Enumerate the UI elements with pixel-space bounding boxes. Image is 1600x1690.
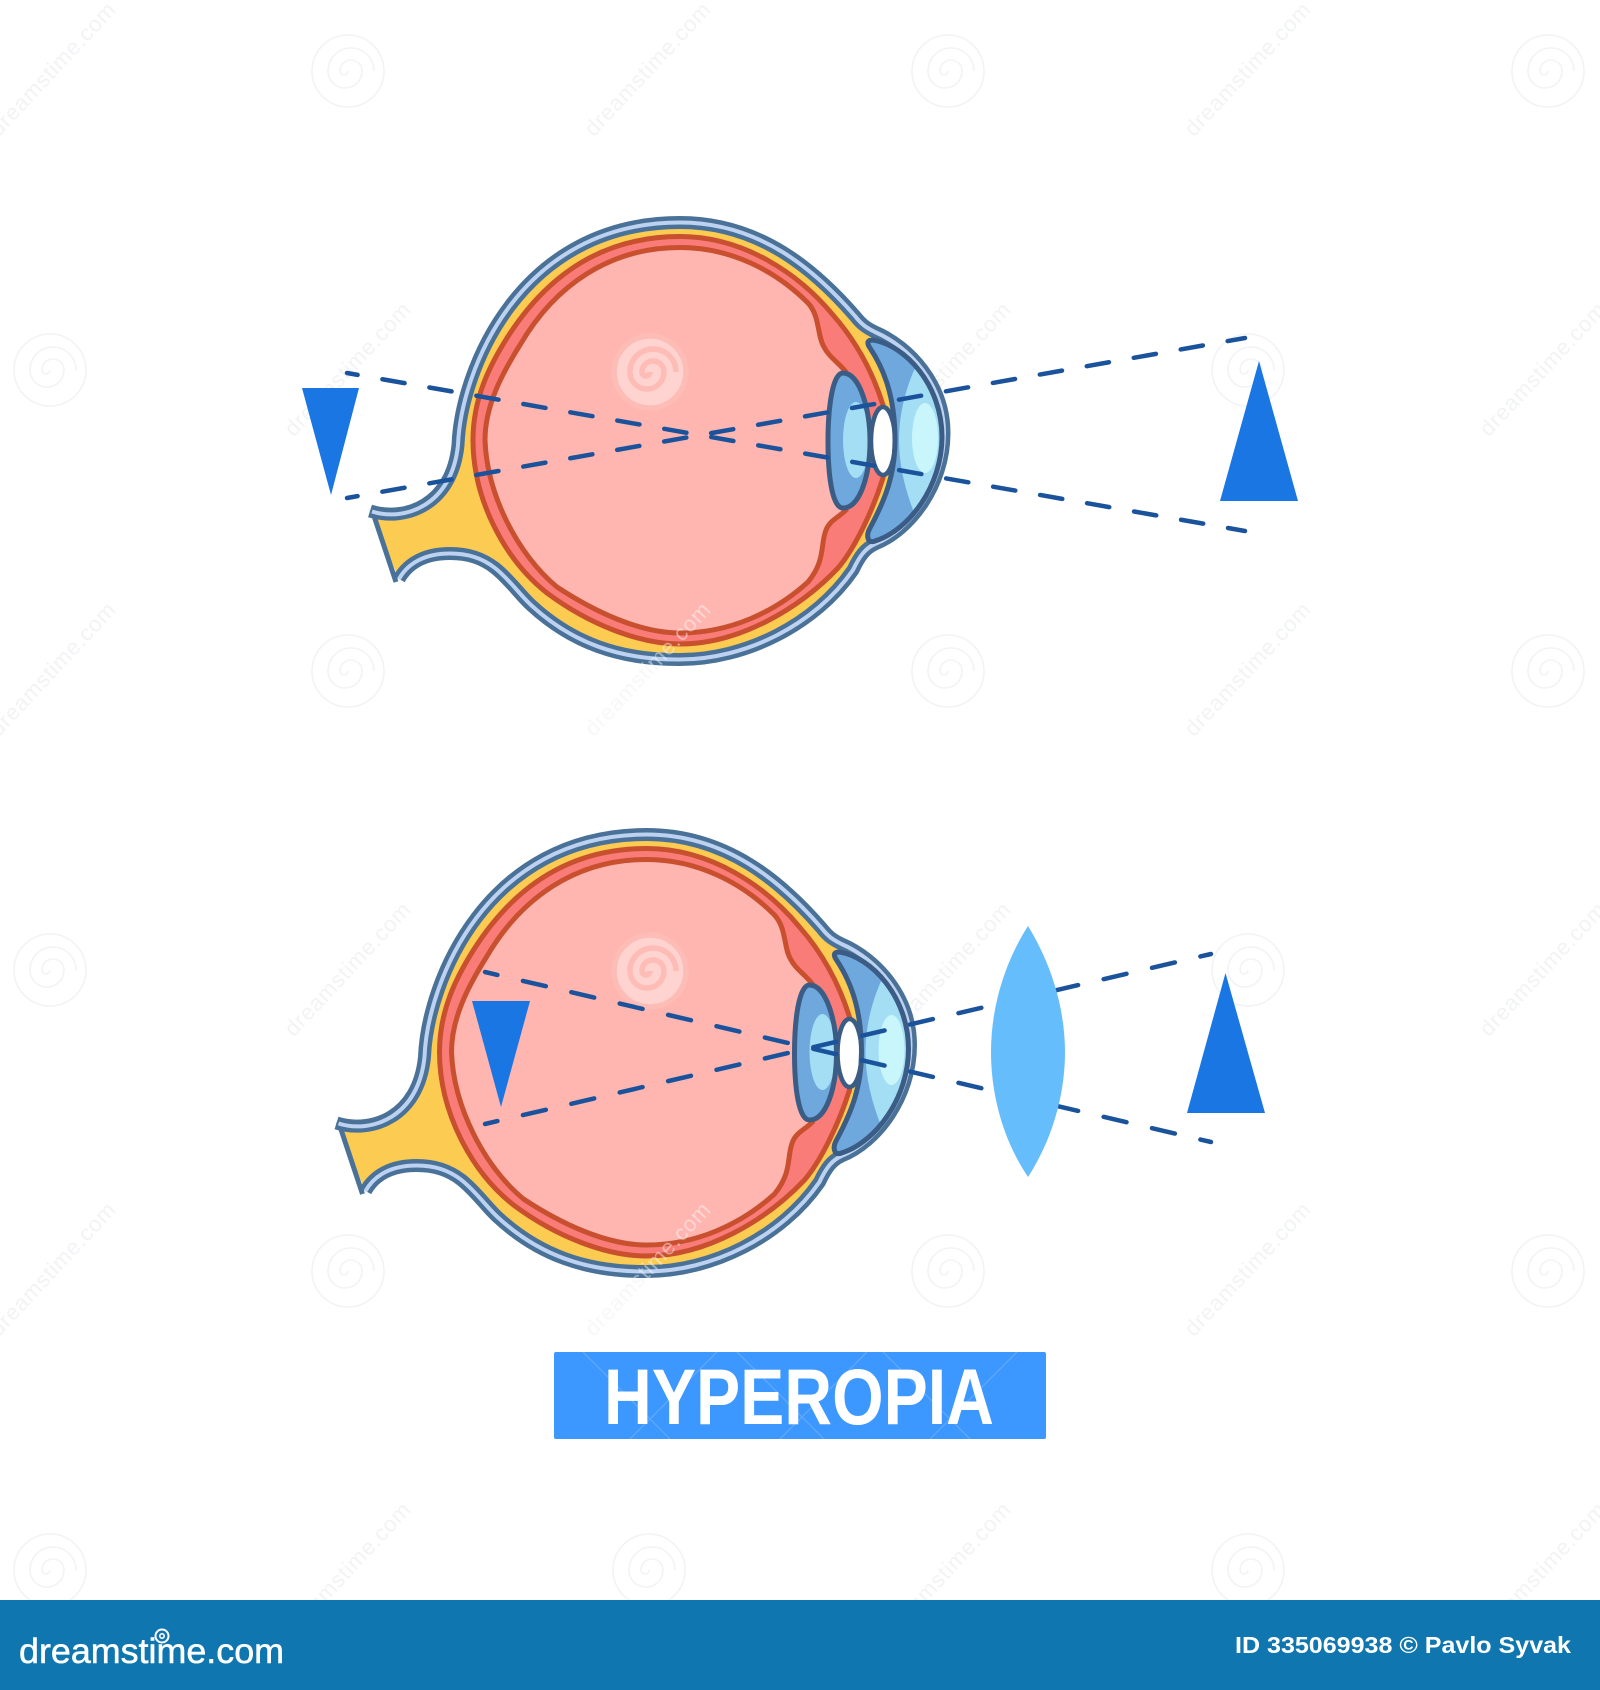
pupil	[838, 1019, 862, 1087]
title text: HYPEROPIA	[604, 1352, 994, 1441]
eye diagram: corrected with converging lens	[336, 834, 1265, 1272]
eyeball: sclera and optic nerve	[336, 834, 910, 1272]
dashed light rays	[347, 338, 1245, 531]
corrective convex lens	[991, 926, 1065, 1177]
vitreous body	[485, 248, 846, 633]
inverted image on the retina	[472, 1001, 530, 1107]
footer credit: ID 335069938 © Pavlo Syvak	[1235, 1632, 1572, 1658]
pupil	[871, 407, 895, 475]
crystalline lens	[794, 985, 836, 1120]
upright object	[1220, 361, 1298, 501]
footer logo: dreamstime.com	[19, 1632, 284, 1671]
upright object	[1187, 973, 1265, 1113]
choroid and retina layer	[473, 236, 883, 644]
dashed light rays	[485, 954, 1211, 1142]
inverted image behind the retina	[302, 388, 359, 495]
eye anatomy	[336, 834, 910, 1272]
vitreous body	[452, 860, 812, 1245]
footer bar	[0, 1600, 1600, 1690]
watermark on vitreous	[614, 935, 686, 1007]
cornea	[834, 952, 908, 1154]
eye diagram: uncorrected hyperopia	[302, 222, 1298, 660]
choroid and retina layer	[440, 848, 850, 1256]
title banner	[554, 1352, 1046, 1441]
watermark on vitreous	[614, 336, 686, 408]
eyeball: sclera and optic nerve	[370, 222, 944, 660]
crystalline lens	[828, 373, 870, 508]
cornea	[868, 340, 942, 542]
